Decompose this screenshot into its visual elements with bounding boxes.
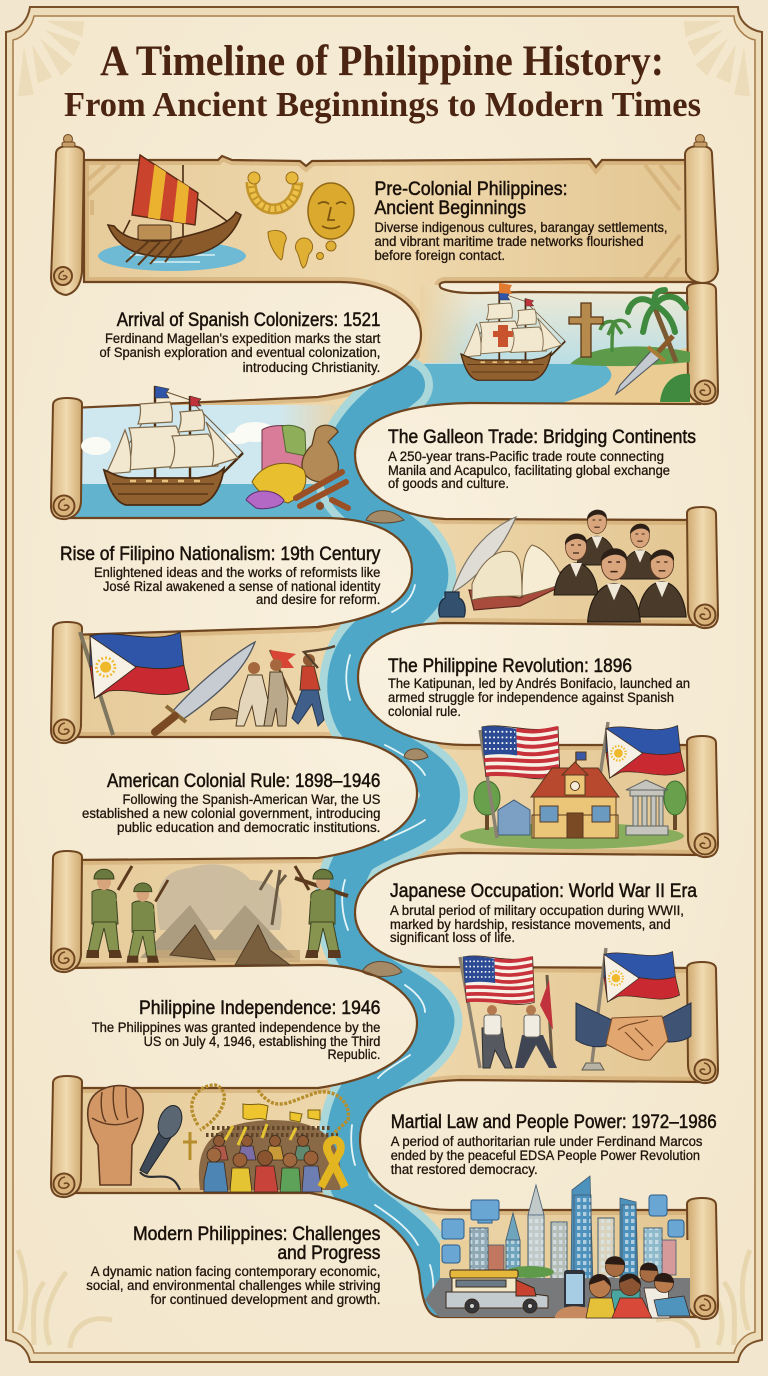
body: Following the Spanish-American War, the US [122, 792, 380, 807]
body: A brutal period of military occupation during WWII, [390, 903, 684, 918]
scene 7: soldiers and ruins [86, 864, 348, 965]
text block: American Colonial Rule [82, 771, 380, 835]
heading: Martial Law and People Power: 1972–1986 [391, 1112, 717, 1133]
icon: handshake [576, 1003, 691, 1060]
body: Enlightened ideas and the works of reformists like [94, 565, 380, 580]
icon: sailing boat [98, 155, 246, 271]
icon: microphone [140, 1102, 186, 1190]
parchment ribbon connecting all scrolls [70, 156, 700, 1317]
text block: Arrival of Spanish Colonizers [100, 310, 381, 375]
body: A 250-year trans-Pacific trade route connecting [388, 449, 664, 464]
title: A Timeline of Philippine History: [100, 38, 664, 85]
body: Ferdinand Magellan's expedition marks the start [105, 331, 381, 346]
icon: ink bottle [439, 592, 465, 617]
icon: smoke and ruins [140, 864, 300, 965]
tribal corner patterns on first scroll [88, 165, 680, 278]
icon: digital app tiles [442, 1195, 684, 1263]
icon: raised fist [88, 1086, 143, 1185]
scroll rollers [51, 134, 718, 1319]
scene 4: quill, book and reformists [439, 510, 686, 622]
body [82, 792, 380, 835]
icon: bolo sword [155, 642, 255, 732]
body: colonial rule. [388, 704, 461, 719]
body: established a new colonial government, introducing [82, 806, 380, 821]
body: A dynamic nation facing contemporary economic, [91, 1264, 380, 1279]
scene 6: American flags and schoolhouse [460, 722, 686, 849]
body: Manila and Acapulco, facilitating global exchange [388, 463, 670, 478]
river [342, 385, 440, 1305]
text block: Modern Philippines [86, 1224, 380, 1307]
scene 3: galleon and trade goods [81, 386, 348, 510]
body: US on July 4, 1946, establishing the Third [144, 1034, 380, 1049]
icon: Philippine flag [604, 952, 680, 1002]
heading: Rise of Filipino Nationalism: 19th Century [60, 544, 381, 565]
flourish: bottom right corner [656, 1250, 750, 1348]
heading: The Galleon Trade: Bridging Continents [388, 427, 696, 448]
icon: galleon [104, 386, 243, 505]
flourish: bottom left corner [18, 1250, 112, 1348]
heading: Pre-Colonial Philippines: [374, 179, 568, 200]
text block: Martial Law and People Power [391, 1112, 717, 1177]
text block: Pre-Colonial Philippines [374, 179, 668, 263]
sun rays: top right corner [684, 21, 750, 96]
text block: Rise of Filipino Nationalism [60, 544, 381, 607]
body: social, and environmental challenges while striving [86, 1278, 380, 1293]
scene 8: independence flags and handshake [460, 948, 691, 1070]
body: The Philippines was granted independence by the [92, 1020, 380, 1035]
body: introducing Christianity. [243, 360, 380, 375]
icon: flag stand [582, 1063, 604, 1070]
body: that restored democracy. [391, 1162, 538, 1177]
icon: open book [469, 545, 566, 610]
icon: Philippine flag pole [598, 722, 608, 790]
body: Diverse indigenous cultures, barangay settlements, [374, 220, 668, 235]
heading: Philippine Independence: 1946 [139, 998, 380, 1019]
icon: gold mask [308, 183, 354, 239]
text block: Galleon Trade [388, 427, 696, 491]
icon: yellow ribbon [321, 1140, 345, 1187]
icon: US flag [463, 956, 534, 1004]
icon: city skyline [425, 1176, 690, 1318]
body [100, 331, 381, 375]
body: public education and democratic institutions. [117, 820, 380, 835]
icon: Philippine flag [90, 632, 189, 698]
icon: government building [626, 780, 668, 835]
heading: The Philippine Revolution: 1896 [388, 656, 632, 677]
body: significant loss of life. [390, 930, 515, 945]
heading: Japanese Occupation: World War II Era [390, 881, 697, 902]
icon: flag pole [80, 632, 113, 735]
icon: trees [474, 781, 686, 830]
title: From Ancient Beginnings to Modern Times [64, 85, 701, 124]
icon: schoolhouse [531, 752, 619, 838]
icon: quill feather [452, 517, 516, 593]
body: and desire for reform. [256, 592, 380, 607]
body: armed struggle for independence against Spanish [388, 690, 674, 705]
icon: grass [460, 823, 684, 849]
body: ended by the peaceful EDSA People Power Revolution [391, 1148, 700, 1163]
body: of Spanish exploration and eventual colonization, [100, 345, 380, 360]
icon: rosary [192, 1085, 348, 1135]
text block: Philippine Revolution [388, 656, 690, 719]
icon: US flag [482, 726, 560, 779]
scene 2: Spanish ship, cross and sword [461, 283, 690, 402]
title [64, 38, 701, 124]
icon: Philippine flag [606, 726, 685, 778]
scene 5: Philippine flag and revolutionaries [80, 632, 335, 735]
icon: trade goods [246, 425, 348, 510]
body: for continued development and growth. [150, 1292, 380, 1307]
sun rays: top left corner [18, 21, 84, 96]
icon: Spanish flag [499, 283, 512, 294]
text block: Modern Philippines: and Progress [278, 1243, 380, 1264]
body: marked by hardship, resistance movements, and [390, 917, 671, 932]
body: The Katipunan, led by Andrés Bonifacio, launched an [388, 676, 690, 691]
heading: American Colonial Rule: 1898–1946 [107, 771, 380, 792]
text block: Japanese Occupation [390, 881, 697, 945]
text block: Pre-Colonial Philippines: Ancient Beginnings [374, 198, 526, 219]
scene 1: boat and gold artifacts [98, 155, 354, 271]
protest crowd [199, 1120, 341, 1192]
icon: soldier two [127, 880, 168, 963]
icon: yellow flags [243, 1104, 320, 1122]
body [374, 220, 668, 263]
body [390, 903, 684, 945]
body [388, 676, 690, 719]
heading: Arrival of Spanish Colonizers: 1521 [117, 310, 380, 331]
body: A period of authoritarian rule under Ferdinand Marcos [391, 1134, 703, 1149]
body: Republic. [328, 1047, 380, 1062]
icon: Philippine flag pole [592, 948, 606, 1062]
body [388, 449, 670, 491]
body [86, 1264, 380, 1307]
icon: Spanish ship [461, 291, 565, 380]
icon: soldier three [295, 866, 348, 958]
heading: Modern Philippines: Challenges [133, 1224, 380, 1245]
icon: sword [616, 336, 673, 394]
body [391, 1134, 703, 1177]
revolutionaries group [210, 646, 335, 726]
icon: jeepney [446, 1270, 548, 1313]
people with smartphone [555, 1256, 690, 1318]
icon: gold ornaments [268, 230, 336, 268]
river rocks [362, 511, 428, 976]
icon: clouds [81, 422, 275, 455]
icon: wooden cross [569, 303, 603, 357]
body: of goods and culture. [388, 476, 509, 491]
body: José Rizal awakened a sense of national identity [103, 579, 381, 594]
icon: Spanish sail emblem [493, 325, 513, 347]
body: before foreign contact. [374, 248, 505, 263]
body: and vibrant maritime trade networks flourished [374, 234, 644, 249]
icon: gold necklace [248, 172, 298, 209]
icon: small house [498, 800, 530, 835]
icon: US flag pole [460, 957, 480, 1068]
ribbon outline [70, 156, 700, 1317]
body [92, 1020, 380, 1062]
scene backgrounds: sea and sky [70, 285, 700, 524]
body [94, 565, 381, 607]
scene 9: People Power symbols [88, 1085, 348, 1192]
people raising flags [482, 975, 557, 1068]
text block: Philippine Independence [92, 998, 380, 1062]
icon: US flag pole [480, 730, 497, 838]
icon: soldier one [86, 866, 132, 958]
icon: palm trees and jungle [570, 290, 690, 402]
scene 10: modern city, jeepney and people [425, 1176, 690, 1318]
icon: rosary cross [183, 1132, 197, 1160]
reformists group [554, 510, 686, 622]
